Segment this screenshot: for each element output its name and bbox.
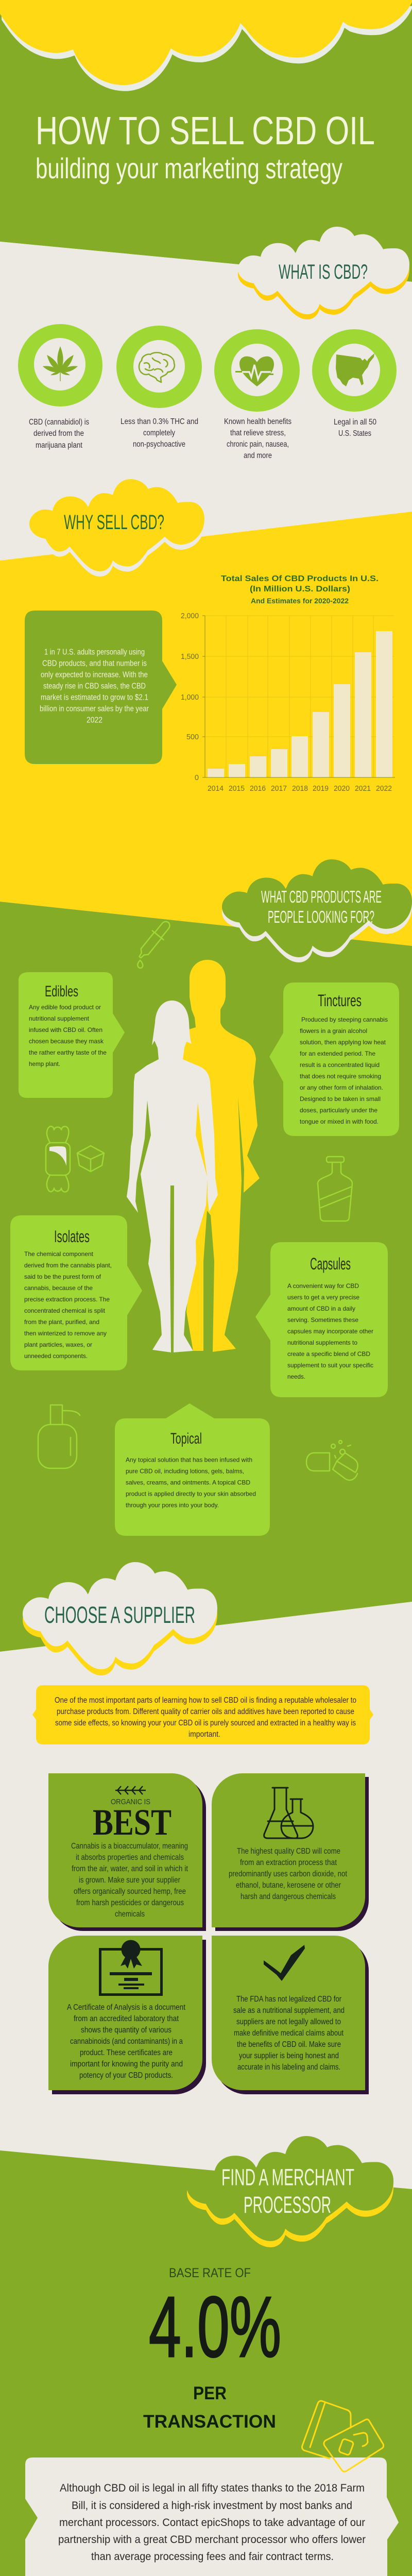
panel: isolates: said to be the purest form of (24, 1273, 101, 1280)
panel: edibles: chosen because they mask (29, 1038, 104, 1045)
panel: FDA labeling: make definitive medical claims about (234, 2029, 344, 2038)
y axis labels: 2,000 (181, 612, 199, 620)
stat: base rate per transaction: 4.0% (149, 2279, 281, 2375)
callout: supplier intro: One of the most important parts of learning how to sell CBD oil is finding a reputable wholesaler to (55, 1696, 356, 1705)
caption: derived from plant: derived from the (33, 429, 84, 438)
callout: market growth: only expected to increase. With the (41, 671, 148, 679)
heading cloud: why sell CBD (29, 479, 204, 577)
top yellow cloud banner (0, 0, 412, 91)
panel: FDA labeling: accurate in his labeling and claims. (237, 2063, 340, 2072)
callout: merchant processing text: merchant processors. Contact epicShops to take advantage of our (59, 2516, 365, 2529)
y axis labels: 0 (195, 774, 199, 782)
panel: topical: product is applied directly to your skin absorbed (126, 1490, 256, 1497)
callout: supplier intro: important. (188, 1730, 220, 1739)
panel: organic is best: Cannabis is a bioaccumulator, meaning (71, 1842, 188, 1851)
panel: organic is best: ORGANIC IS (111, 1798, 150, 1806)
icon: flasks (264, 1788, 313, 1838)
panel: isolates: precise extraction process. The (24, 1296, 110, 1303)
panel: tinctures: solution, then applying low heat (300, 1039, 386, 1046)
icon: pump bottle (38, 1405, 80, 1468)
heading cloud: what is CBD (238, 227, 409, 319)
x axis labels: 2017 (271, 785, 287, 793)
icon: leaf arrows (115, 1786, 146, 1794)
panel: FDA labeling: The FDA has not legalized CBD for (236, 1995, 341, 2004)
panel: tinctures: result is a concentrated liquid (300, 1061, 380, 1069)
panel: organic is best: offers organically sourced hemp, free (74, 1887, 186, 1896)
panel: extraction process: predominantly uses carbon dioxide, not (229, 1870, 348, 1878)
callout: merchant processing text: partnership with a great CBD merchant processor who offers lower (58, 2533, 366, 2546)
callout: market growth (25, 611, 177, 764)
y axis labels: 500 (186, 733, 199, 741)
panel: isolates: The chemical component (24, 1250, 94, 1258)
caption: derived from plant (29, 418, 89, 450)
panel: topical: pure CBD oil, including lotions, gels, balms, (126, 1467, 244, 1475)
panel: topical: Any topical solution that has been infused with (126, 1456, 252, 1463)
panel: topical: through your pores into your body. (126, 1501, 219, 1509)
chart title: And Estimates for 2020-2022 (251, 597, 349, 605)
panel: tinctures: doses, particularly under the (300, 1107, 377, 1114)
heading cloud: choose a supplier: CHOOSE A SUPPLIER (44, 1602, 195, 1628)
x axis labels: 2019 (313, 785, 329, 793)
panel: edibles: the rather earthy taste of the (29, 1049, 107, 1056)
panel: FDA labeling: the benefits of CBD oil. Make sure (237, 2040, 341, 2049)
panel: capsules: create a specific blend of CBD (287, 1350, 370, 1358)
y axis labels: 1,000 (181, 693, 199, 702)
panel: capsules (255, 1242, 388, 1397)
title (36, 109, 375, 184)
panel: isolates (10, 1215, 142, 1370)
caption: legal status: U.S. States (338, 429, 371, 438)
panel: edibles: Edibles (45, 983, 78, 1000)
panel: tinctures: or any other form of inhalation. (300, 1084, 383, 1091)
callout: merchant processing text: Bill, it is considered a high-risk investment by most banks and (72, 2499, 352, 2512)
caption: THC level: non-psychoactive (133, 440, 185, 449)
panel: edibles: hemp plant. (29, 1060, 60, 1067)
panel: tinctures: tongue or mixed in with food. (300, 1118, 379, 1125)
heading cloud: find a merchant processor: PROCESSOR (244, 2192, 331, 2218)
silhouette: man (159, 960, 260, 1352)
caption: derived from plant: marijuana plant (36, 441, 83, 450)
heading cloud: what CBD products (222, 859, 412, 962)
icon: dropper (134, 918, 174, 962)
icon: cannabis leaf in ring (18, 324, 102, 406)
caption: legal status: Legal in all 50 (334, 418, 376, 427)
icon: brain in ring (116, 326, 202, 408)
panel: capsules: users to get a very precise (287, 1294, 359, 1301)
panel: certificate of analysis (48, 1936, 206, 2094)
caption: health benefits: and more (244, 451, 272, 460)
icon: heart with pulse in ring (214, 329, 300, 412)
panel: certificate of analysis: shows the quantity of various (81, 2026, 171, 2035)
panel: tinctures: Produced by steeping cannabis (301, 1016, 388, 1023)
caption: THC level: completely (143, 429, 175, 437)
icon: certificate (100, 1940, 162, 1995)
heading cloud: find a merchant processor (187, 2136, 393, 2247)
icon: USA map in ring (312, 329, 397, 412)
panel: organic is best: from harsh pesticides or dangerous (76, 1899, 184, 1907)
stat: base rate per transaction: TRANSACTION (143, 2412, 276, 2432)
callout: market growth: market is estimated to grow to $2.1 (41, 693, 148, 702)
x axis labels: 2018 (292, 785, 308, 793)
icon: credit cards (302, 2401, 384, 2471)
x axis labels: 2020 (334, 785, 350, 793)
callout: merchant processing text (25, 2458, 399, 2576)
panel: organic is best (48, 1773, 206, 1931)
panel: capsules: nutritional supplements to (287, 1339, 357, 1346)
panel: isolates: Isolates (54, 1227, 90, 1246)
callout: market growth: 2022 (87, 716, 102, 724)
callout: market growth: billion in consumer sales by the year (40, 705, 149, 713)
panel: tinctures: Designed to be taken in small (300, 1095, 381, 1103)
panel: certificate of analysis: A Certificate of Analysis is a document (67, 2003, 186, 2012)
panel: organic is best: from the air, water, and soil in which it (72, 1865, 188, 1873)
panel: tinctures: for an extended period. The (300, 1050, 375, 1057)
bars (208, 631, 392, 777)
panel: topical (115, 1403, 270, 1536)
panel: certificate of analysis: cannabinoids (and contaminants) in a (70, 2037, 183, 2046)
caption: legal status (334, 418, 376, 438)
panel: organic is best: chemicals (115, 1910, 145, 1919)
panel: edibles: nutritional supplement (29, 1015, 90, 1022)
x axis labels: 2014 (208, 785, 224, 793)
panel: edibles (19, 972, 125, 1098)
caption: health benefits: Known health benefits (224, 417, 291, 426)
panel: capsules: A convenient way for CBD (287, 1282, 359, 1290)
panel: edibles: Any edible food product or (29, 1004, 101, 1011)
panel: FDA labeling: suppliers are not legally allowed to (236, 2018, 341, 2026)
callout: supplier intro: some side effects, so knowing your your CBD oil is purely sourced and extracted in a healthy way is (55, 1719, 356, 1727)
icon: candy and sugar cube (46, 1126, 104, 1192)
panel: capsules: needs. (287, 1373, 305, 1380)
panel: topical: Topical (170, 1430, 202, 1447)
panel: extraction process: ethanol, butane, kerosene or other (236, 1881, 341, 1890)
caption: health benefits: chronic pain, nausea, (227, 440, 289, 449)
bar chart: total CBD sales (181, 574, 395, 793)
panel: edibles: infused with CBD oil. Often (29, 1026, 102, 1033)
chart title (221, 574, 379, 605)
x axis labels: 2016 (250, 785, 266, 793)
x axis labels: 2015 (229, 785, 245, 793)
stat: base rate per transaction: BASE RATE OF (169, 2266, 251, 2280)
callout: merchant processing text: Although CBD oil is legal in all fifty states thanks to the 2018 Farm (60, 2482, 365, 2494)
panel: organic is best: it absorbs properties and chemicals (76, 1853, 184, 1862)
icon: check mark (264, 1945, 305, 1981)
panel: FDA labeling: your supplier is being honest and (239, 2052, 339, 2060)
heading cloud: choose a supplier (23, 1562, 217, 1675)
panel: FDA labeling (212, 1936, 369, 2094)
panel: isolates: derived from the cannabis plant, (24, 1262, 112, 1269)
panel: capsules: supplement to suit your specific (287, 1362, 373, 1369)
panel: extraction process: from an extraction process that (240, 1858, 337, 1867)
panel: topical: salves, creams, and ointments. A topical CBD (126, 1479, 250, 1486)
panel: organic is best: BEST (93, 1802, 171, 1843)
panel: extraction process (212, 1773, 369, 1931)
callout: market growth: steady rise in CBD sales, the CBD (43, 682, 146, 690)
panel: certificate of analysis: from an accredited laboratory that (74, 2014, 179, 2023)
callout: market growth: CBD products, and that number is (42, 659, 147, 668)
panel: extraction process: harsh and dangerous chemicals (241, 1892, 336, 1901)
icon: capsule pills (306, 1440, 358, 1480)
panel: capsules: capsules may incorporate other (287, 1328, 373, 1335)
caption: THC level: Less than 0.3% THC and (121, 417, 198, 426)
icon: droplet (138, 960, 143, 968)
x axis labels: 2021 (355, 785, 371, 793)
panel: capsules: Capsules (310, 1255, 351, 1273)
panel: isolates: then winterized to remove any (24, 1330, 107, 1337)
panel: FDA labeling: sale as a nutritional supplement, and (233, 2006, 345, 2015)
icon: bottle (318, 1157, 352, 1221)
panel: isolates: concentrated chemical is split (24, 1307, 106, 1314)
panel: tinctures: that does not require smoking (300, 1073, 381, 1080)
panel: organic is best: is grown. Make sure your supplier (79, 1876, 180, 1885)
panel: tinctures: Tinctures (318, 991, 362, 1010)
stat: base rate per transaction (143, 2266, 281, 2432)
callout: supplier intro: purchase products from. Different quality of carrier oils and additives have been reported to cause (57, 1707, 354, 1716)
panel: extraction process: The highest quality CBD will come (237, 1847, 340, 1856)
panel: isolates: plant particles, waxes, or (24, 1341, 92, 1348)
panel: tinctures: flowers in a grain alcohol (300, 1027, 367, 1035)
y axis labels: 1,500 (181, 653, 199, 661)
panel: capsules: serving. Sometimes these (287, 1316, 358, 1324)
panel: certificate of analysis: important for knowing the purity and (70, 2060, 183, 2069)
panel: isolates: unneeded components. (24, 1352, 88, 1360)
callout: market growth: 1 in 7 U.S. adults personally using (44, 648, 145, 656)
panel: certificate of analysis: product. These certificates are (80, 2048, 173, 2057)
callout: merchant processing text: than average processing fees and fair contract terms. (91, 2550, 334, 2563)
caption: health benefits (224, 417, 291, 460)
panel: certificate of analysis: potency of your CBD products. (79, 2071, 173, 2080)
silhouette: woman (127, 1001, 218, 1352)
y axis labels (181, 612, 199, 782)
panel: capsules: amount of CBD in a daily (287, 1305, 355, 1312)
chart title: Total Sales Of CBD Products In U.S. (221, 574, 379, 583)
panel: tinctures (269, 982, 399, 1136)
panel: isolates: from the plant, purified, and (24, 1318, 99, 1326)
heading cloud: why sell CBD: WHY SELL CBD? (64, 511, 164, 534)
caption: derived from plant: CBD (cannabidiol) is (29, 418, 89, 427)
callout: supplier intro (32, 1685, 373, 1744)
chart title: (In Million U.S. Dollars) (250, 585, 350, 594)
panel: isolates: cannabis, because of the (24, 1284, 93, 1292)
x axis labels (208, 785, 392, 793)
x axis labels: 2022 (376, 785, 392, 793)
caption: health benefits: that relieve stress, (230, 429, 286, 437)
stat: base rate per transaction: PER (193, 2383, 227, 2403)
caption: THC level (121, 417, 198, 449)
